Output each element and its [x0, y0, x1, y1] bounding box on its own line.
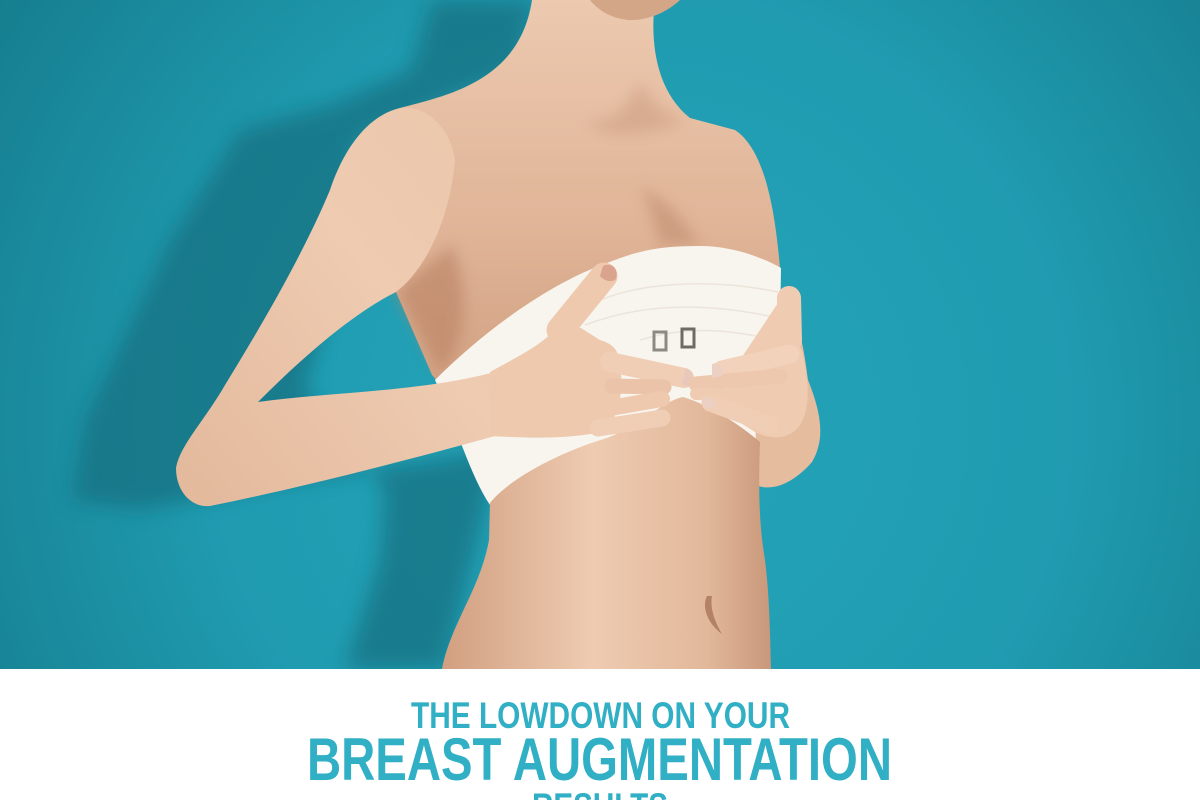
white footer band [0, 669, 1200, 800]
navel [705, 596, 722, 634]
neck and upper chest [360, 0, 780, 420]
chin [590, 0, 680, 20]
far arm [755, 300, 820, 487]
neck shadow [585, 80, 685, 134]
armpit shading [396, 245, 464, 372]
title [307, 695, 892, 800]
figure shadow on the wall [72, 0, 535, 669]
near arm [176, 108, 495, 506]
metal clips [654, 329, 694, 350]
title line 1: THE LOWDOWN ON YOUR [411, 695, 790, 736]
photo subject: torso and arms in medical bandage [176, 0, 820, 669]
far hand [696, 298, 808, 437]
near hand [490, 265, 693, 438]
waist and abdomen [442, 397, 771, 669]
bandage wrap [435, 246, 781, 505]
bandage wrap folds [585, 284, 778, 340]
title line 2: BREAST AUGMENTATION [307, 726, 892, 793]
cleavage shading [640, 185, 700, 245]
